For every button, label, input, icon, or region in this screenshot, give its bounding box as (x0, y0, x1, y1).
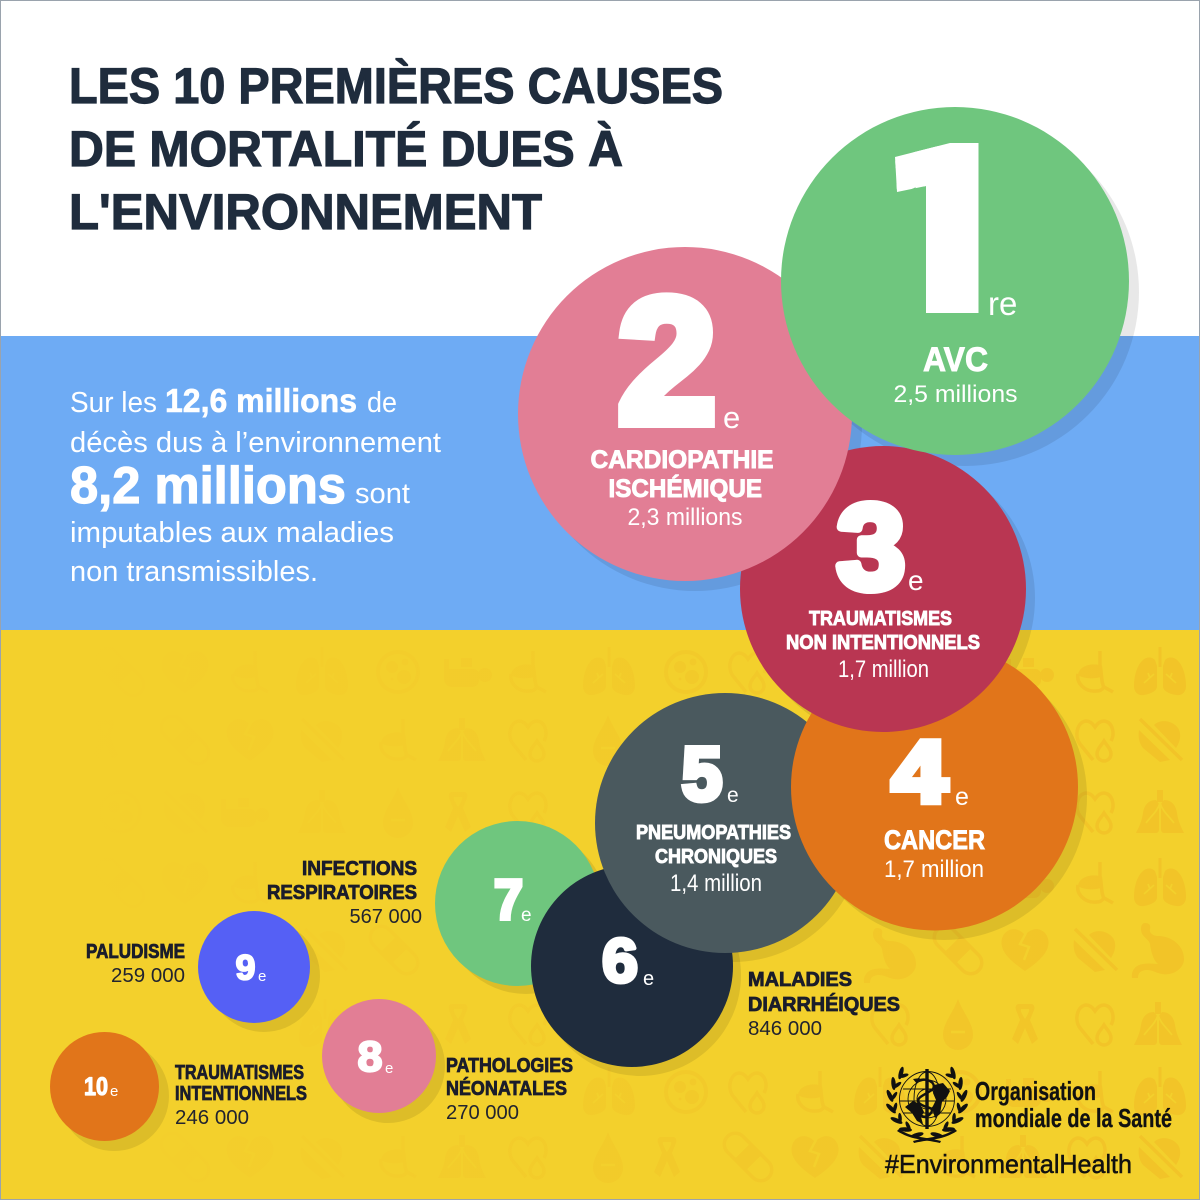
circle: 2e: 2,3 millions (628, 504, 742, 531)
label: paludisme (86, 941, 185, 987)
circle: 5e (595, 693, 855, 953)
circle: 4e: 4 (892, 724, 947, 820)
label: infections respiratoires: INFECTIONS (302, 858, 417, 880)
circle: 10e: e (110, 1083, 118, 1100)
title: L'ENVIRONNEMENT (69, 184, 542, 240)
circle: 3e: 3 (837, 480, 905, 614)
circle shadows (59, 118, 1139, 1151)
circle: 4e (791, 644, 1078, 930)
intro text block: décès dus à l’environnement (70, 427, 441, 459)
background: yellow band (0, 630, 1200, 1200)
circle: 5e: PNEUMOPATHIES (636, 822, 791, 844)
circle: 9e (198, 911, 310, 1023)
circle: 6e: 6 (602, 927, 638, 996)
circle: 2e: ISCHÉMIQUE (608, 474, 762, 503)
circle: 1re (781, 91, 1129, 455)
intro text block: non transmissibles. (70, 556, 318, 588)
circle: 8e (322, 999, 436, 1113)
circle: 2e: e (723, 400, 740, 435)
circle: 4e: CANCER (884, 825, 985, 855)
circle: 9e: 9 (236, 948, 256, 988)
title: DE MORTALITÉ DUES À (69, 121, 623, 177)
circle: 4e: e (955, 783, 969, 811)
label: maladies diarrhéiques: DIARRHÉIQUES (748, 993, 900, 1016)
label: traumatismes intentionnels (175, 1062, 307, 1129)
circle: 7e: 7 (494, 868, 523, 932)
circle: 1re: 2,5 millions (894, 381, 1018, 408)
circle: 5e: 5 (682, 732, 722, 816)
label: traumatismes intentionnels: INTENTIONNELS (175, 1083, 307, 1105)
circle: 3e: TRAUMATISMES (809, 608, 952, 630)
circle: 8e: 8 (358, 1033, 382, 1081)
circle: 6e: e (643, 968, 654, 990)
intro text block: 12,6 millions (165, 382, 357, 419)
label: traumatismes intentionnels: 246 000 (175, 1107, 249, 1129)
title: LES 10 PREMIÈRES CAUSES (69, 58, 723, 114)
title (69, 58, 723, 240)
circle: 6e (531, 865, 733, 1067)
circle: 2e (518, 247, 852, 581)
label: maladies diarrhéiques: 846 000 (748, 1018, 822, 1040)
intro text block: sont (355, 478, 410, 510)
circle: 3e (740, 446, 1026, 732)
circle: 1re: AVC (923, 341, 988, 379)
intro text block: de (367, 387, 397, 419)
label: pathologies néonatales (446, 1055, 573, 1124)
circle: 10e: 10 (84, 1073, 108, 1101)
hashtag: #EnvironmentalHealth (885, 1149, 1132, 1179)
intro text block (70, 382, 441, 588)
label: pathologies néonatales: PATHOLOGIES (446, 1055, 573, 1077)
label: pathologies néonatales: NÉONATALES (446, 1077, 567, 1100)
organisation name: Organisation (975, 1076, 1096, 1106)
label: maladies diarrhéiques: MALADIES (748, 969, 852, 991)
circle: 10e (50, 1032, 159, 1141)
circle: 9e: e (258, 968, 266, 985)
circle: 1re: 1 (843, 91, 1035, 381)
circle: 5e: e (727, 784, 739, 807)
label: pathologies néonatales: 270 000 (446, 1102, 519, 1124)
circle: 4e: 1,7 million (884, 856, 984, 883)
intro text block: 8,2 millions (70, 457, 346, 515)
background: white band (0, 0, 1200, 336)
health icon pattern (92, 644, 1186, 1185)
circle: 2e: 2 (618, 262, 716, 460)
circle: 5e: 1,4 million (670, 870, 762, 897)
label: paludisme: 259 000 (111, 965, 185, 987)
label: infections respiratoires: RESPIRATOIRES (267, 882, 417, 904)
circle: 5e: CHRONIQUES (655, 846, 777, 868)
circle: 8e: e (385, 1060, 393, 1077)
circle: 2e: CARDIOPATHIE (590, 446, 774, 474)
intro text block: Sur les (70, 387, 157, 419)
label: infections respiratoires: 567 000 (350, 906, 422, 928)
circle: 3e: e (908, 565, 924, 596)
circle: 3e: 1,7 million (838, 656, 929, 683)
label: maladies diarrhéiques (748, 969, 900, 1040)
circle: 3e: NON INTENTIONNELS (786, 632, 980, 654)
circle: 1re: re (988, 285, 1017, 322)
organisation name (975, 1076, 1172, 1133)
background: blue band (0, 336, 1200, 631)
icon: WHO emblem (885, 1066, 969, 1143)
intro text block: imputables aux maladies (70, 517, 394, 549)
label: traumatismes intentionnels: TRAUMATISMES (175, 1062, 304, 1084)
circle: 7e (435, 821, 600, 986)
label: infections respiratoires (267, 858, 422, 928)
label: paludisme: PALUDISME (86, 941, 185, 963)
circle: 7e: e (521, 905, 532, 926)
